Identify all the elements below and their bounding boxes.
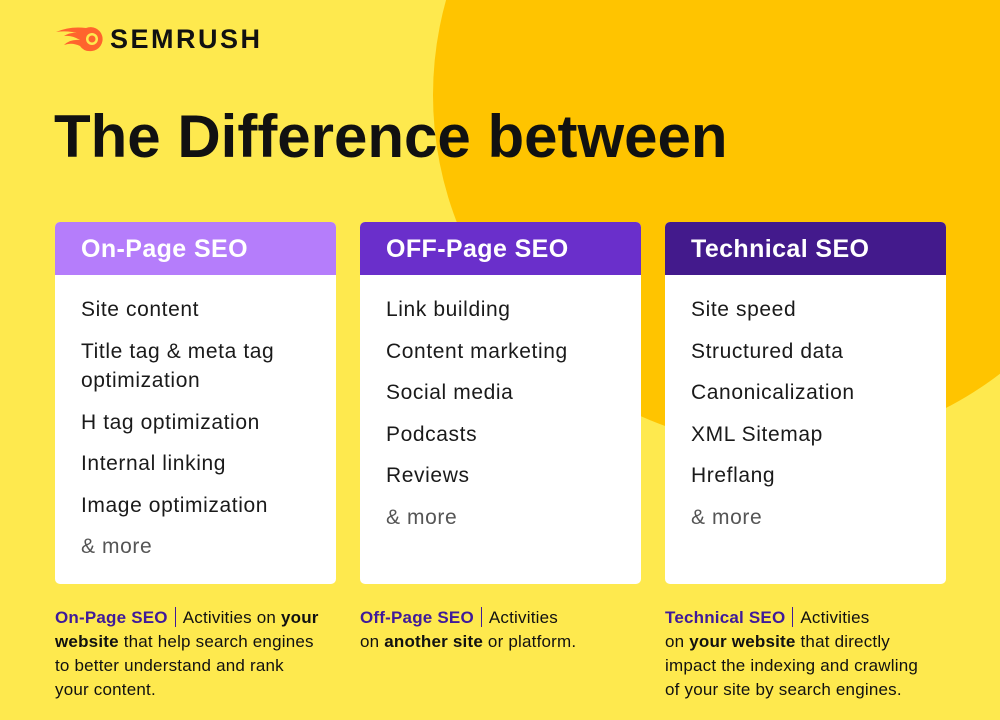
header: off-page: OFF-Page SEO bbox=[386, 235, 569, 263]
list: technical: Canonicalization bbox=[691, 381, 855, 404]
list: off-page: Content marketing bbox=[386, 340, 568, 362]
list: on-page: Internal linking bbox=[81, 452, 226, 475]
list: technical: Hreflang bbox=[691, 464, 775, 487]
description: technical bbox=[665, 607, 918, 699]
list: on-page: H tag optimization bbox=[81, 410, 260, 434]
header: on-page bbox=[55, 222, 336, 275]
list: on-page: & more bbox=[81, 535, 152, 558]
description: on-page: website that help search engines bbox=[55, 632, 314, 651]
description: technical: impact the indexing and crawling bbox=[665, 656, 918, 675]
list: technical: Structured data bbox=[691, 340, 844, 362]
description: on-page: On-Page SEO Activities on your bbox=[55, 608, 319, 627]
list: technical bbox=[691, 298, 855, 528]
list: technical: Site speed bbox=[691, 298, 796, 321]
header: off-page bbox=[360, 222, 641, 275]
list: technical: & more bbox=[691, 506, 762, 528]
panel: technical bbox=[665, 222, 946, 584]
description: technical: Technical SEO Activities bbox=[665, 608, 869, 627]
list: off-page: Social media bbox=[386, 381, 513, 404]
header: on-page: On-Page SEO bbox=[81, 235, 248, 263]
list: off-page: Link building bbox=[386, 298, 511, 321]
description: off-page: on another site or platform. bbox=[360, 632, 576, 651]
panel: on-page bbox=[55, 222, 336, 584]
list: off-page: Reviews bbox=[386, 464, 470, 487]
list: off-page bbox=[386, 298, 568, 528]
header: technical: Technical SEO bbox=[691, 235, 869, 263]
list: on-page: Image optimization bbox=[81, 494, 268, 516]
list: off-page: Podcasts bbox=[386, 422, 477, 446]
panel: off-page bbox=[360, 222, 641, 584]
icon: flame bbox=[56, 27, 103, 52]
description: technical: on your website that directly bbox=[665, 632, 890, 651]
description: technical: of your site by search engines. bbox=[665, 680, 902, 699]
logo bbox=[56, 24, 263, 54]
list: on-page bbox=[81, 298, 274, 558]
description: off-page bbox=[360, 607, 576, 651]
list: on-page: optimization bbox=[81, 369, 200, 392]
title: The Difference between bbox=[54, 103, 728, 170]
header: technical bbox=[665, 222, 946, 275]
list: off-page: & more bbox=[386, 506, 457, 528]
description: on-page: your content. bbox=[55, 680, 156, 699]
list: on-page: Site content bbox=[81, 298, 199, 321]
list: on-page: Title tag & meta tag bbox=[81, 340, 274, 362]
description: on-page: to better understand and rank bbox=[55, 656, 284, 675]
brand name: SEMRUSH bbox=[110, 24, 263, 54]
description: off-page: Off-Page SEO Activities bbox=[360, 608, 558, 627]
description: on-page bbox=[55, 607, 319, 699]
list: technical: XML Sitemap bbox=[691, 422, 823, 446]
